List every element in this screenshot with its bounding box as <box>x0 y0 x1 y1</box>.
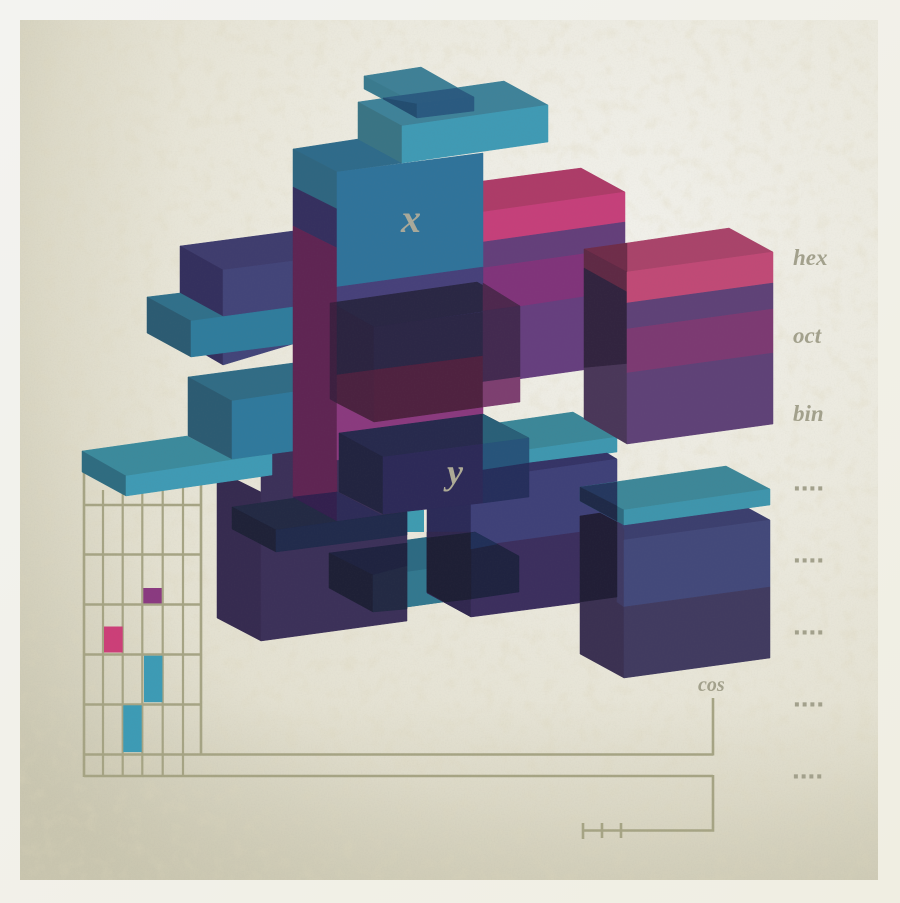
block: cyan pieces behind center <box>407 510 443 607</box>
block: right lower navy block <box>580 508 770 678</box>
block: main column <box>293 139 483 521</box>
block: back cyan slab <box>483 412 617 471</box>
block: small top slab <box>364 67 474 118</box>
label: y: y <box>443 452 464 492</box>
label: hex: hex <box>793 245 828 270</box>
chart bar: pink <box>104 626 123 652</box>
block: y block <box>339 414 529 514</box>
grid chart <box>84 470 713 839</box>
block: teal cube left middle <box>188 363 293 459</box>
block: top cyan slab <box>358 81 548 163</box>
block: lower center navy block <box>427 453 617 617</box>
chart bar: cyan upper <box>144 656 162 702</box>
block: right cyan slab <box>580 466 770 525</box>
block: upper left navy cube <box>180 231 293 365</box>
label: cos: cos <box>698 674 725 696</box>
chart bar: cyan lower <box>123 705 142 752</box>
block: teal slab left <box>147 293 293 357</box>
block: right front pink stack <box>584 228 773 444</box>
label: x: x <box>400 196 421 241</box>
dots row 2: .... <box>793 538 824 568</box>
dots row 4: .... <box>793 682 824 712</box>
label: oct: oct <box>793 323 822 348</box>
connector: cos line <box>712 698 714 756</box>
dots row 1: .... <box>793 466 824 496</box>
dots row 3: .... <box>793 610 824 640</box>
block: back pink stack <box>483 168 625 384</box>
block: center dark slab <box>232 492 407 552</box>
connector: bracket with ticks <box>583 775 713 839</box>
block: small dark block center <box>329 543 407 612</box>
dots row 5: .... <box>792 754 823 784</box>
block: central dark translucent block <box>330 282 520 422</box>
label: bin: bin <box>793 401 824 426</box>
chart bar: purple <box>143 588 162 603</box>
block: big purple block lower left <box>217 440 407 641</box>
block: cyan slab over grid <box>82 436 272 496</box>
block: small dark block right <box>427 532 519 602</box>
